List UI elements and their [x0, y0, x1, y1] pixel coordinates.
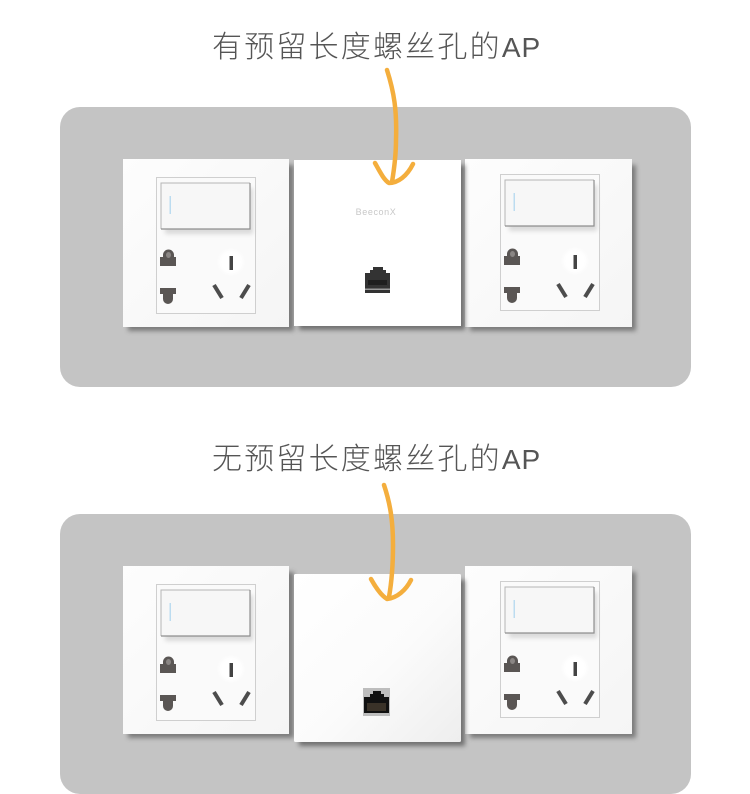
switch socket: top left — [123, 159, 294, 331]
switch socket: bottom right — [465, 566, 636, 738]
arrow: bottom — [371, 485, 411, 599]
access point: with screw holes — [294, 160, 465, 330]
switch socket: bottom left — [123, 566, 294, 738]
icon: network port — [363, 688, 390, 716]
brand label: BeeconX — [356, 207, 396, 217]
switch socket: top right — [465, 159, 636, 331]
arrow: top — [375, 70, 413, 183]
panel: bottom wall — [60, 514, 691, 794]
access point: without screw holes — [294, 574, 465, 746]
icon: network port — [365, 267, 390, 293]
title: bottom: 无预留长度螺丝孔的AP — [212, 443, 541, 476]
panel: top wall — [60, 107, 691, 387]
title: top: 有预留长度螺丝孔的AP — [212, 31, 541, 64]
